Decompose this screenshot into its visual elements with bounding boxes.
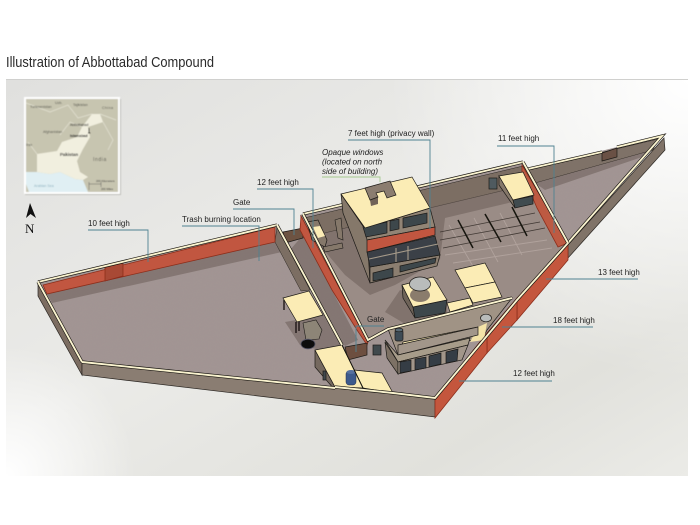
central courtyard floor <box>303 166 568 342</box>
label: 12 feet high outer: 12 feet high <box>513 369 555 378</box>
main house <box>341 177 440 283</box>
map: Arabian Sea <box>26 172 88 192</box>
carport <box>283 291 323 349</box>
label: 12 feet high inner: 12 feet high <box>257 178 299 187</box>
annex: satellite dish <box>410 277 430 291</box>
front wall tops <box>38 162 568 398</box>
main house: roof <box>341 177 430 228</box>
bottom building: small dish <box>480 314 492 322</box>
main house: lower floor <box>370 255 440 283</box>
label: 7 feet privacy wall <box>348 129 435 229</box>
carport: tyre pit <box>301 339 315 349</box>
gate 2 and door <box>345 343 381 360</box>
small shed by red wall <box>307 220 327 247</box>
label: 12 feet high inner <box>257 178 313 248</box>
floor <box>38 136 662 398</box>
main house: middle floor <box>367 236 440 267</box>
outer wall faces <box>38 138 665 417</box>
courtyard grid <box>440 207 552 268</box>
map: labels: Iran <box>26 143 32 147</box>
bottom building: canopy <box>385 338 470 362</box>
map: labels: 200 Miles <box>101 187 114 191</box>
top right building <box>499 172 534 208</box>
bottom building: roof level <box>388 298 512 355</box>
map: labels: Pakistan <box>60 152 78 157</box>
red wall: 12 feet outer <box>435 333 487 418</box>
label: 13 feet high <box>546 268 640 279</box>
map: labels: Turkmenistan <box>30 105 52 109</box>
red wall: 10 feet <box>43 227 275 294</box>
north arrow: N <box>25 221 35 236</box>
label: 12 feet high outer <box>459 369 555 381</box>
bottom building: side <box>385 342 398 374</box>
label: 10 feet high <box>88 219 148 262</box>
blue barrel <box>346 370 356 385</box>
cream sheds <box>447 263 502 312</box>
label: 18 feet high <box>502 316 595 327</box>
right gate <box>602 148 617 161</box>
map: labels <box>26 101 115 191</box>
locator map <box>24 97 121 195</box>
label: opaque windows <box>322 148 383 182</box>
title: Illustration of Abbottabad Compound <box>6 55 214 71</box>
back wall gates and door <box>283 148 617 243</box>
map: borders <box>26 103 116 154</box>
label: gate: Gate <box>233 198 251 207</box>
left divider wall inner face <box>275 227 310 291</box>
red wall: 10 feet gate <box>105 263 123 281</box>
map: labels: 200 Kilometers <box>96 179 115 183</box>
annex: dish shadow <box>410 288 430 302</box>
annex with dish <box>402 277 447 318</box>
map: scale bar <box>89 182 101 190</box>
main house: side <box>341 194 370 283</box>
back door <box>489 178 497 189</box>
back wall inner faces <box>304 139 658 236</box>
map: labels: Uzb. <box>55 101 62 105</box>
map: labels: Islamabad <box>70 134 88 138</box>
map: labels: Arabian Sea <box>34 184 54 188</box>
red wall: 13 feet <box>517 243 568 320</box>
bottom building: cream roof strip <box>402 327 478 345</box>
back wall tops <box>38 136 662 282</box>
bottom building: water tank <box>395 328 403 341</box>
map: labels: Tajikistan <box>73 103 88 107</box>
label: 11 feet high: 11 feet high <box>498 134 539 143</box>
label: gate 2 <box>356 315 385 352</box>
main house: red band <box>367 227 435 252</box>
bottom building: upper front <box>398 327 478 355</box>
main house: rooftop structure <box>365 181 396 200</box>
label: 18 feet high: 18 feet high <box>553 316 595 325</box>
north gate <box>283 228 303 243</box>
label: 13 feet high: 13 feet high <box>598 268 640 277</box>
label: opaque windows: (located on north <box>322 158 383 166</box>
courtyard stub walls <box>323 218 343 252</box>
bottom building: lower front <box>398 345 468 374</box>
bottom building <box>385 298 512 374</box>
north arrow <box>25 203 36 236</box>
label: 7 feet privacy wall: 7 feet high (privacy wall) <box>348 129 435 138</box>
label: trash burning location <box>182 215 261 261</box>
map: labels: Afghanistan <box>43 130 62 134</box>
carport: roof <box>283 291 323 322</box>
label: opaque windows: side of building) <box>322 167 378 176</box>
carport: bin <box>303 320 322 340</box>
lower left outbuildings <box>315 345 393 393</box>
red wall: 18 feet <box>487 298 517 353</box>
red wall: 12 feet inner <box>300 216 368 345</box>
carport: legs <box>284 300 299 333</box>
map: labels: China <box>102 106 113 110</box>
map: labels: India <box>93 157 107 163</box>
compound illustration <box>38 136 665 418</box>
main house: rooftop structure shadow <box>370 197 378 206</box>
map: Pakistan <box>37 114 103 180</box>
floor shadows <box>47 150 653 350</box>
label: opaque windows: Opaque windows <box>322 148 383 157</box>
red wall: 11 feet inner <box>522 165 568 247</box>
label: 11 feet high <box>497 134 554 233</box>
label: 10 feet high: 10 feet high <box>88 219 130 228</box>
background panel <box>6 79 688 476</box>
label: trash burning location: Trash burning location <box>182 215 261 224</box>
map: labels: Abbottabad <box>70 123 88 127</box>
main house: upper front <box>365 208 435 240</box>
map: city marker <box>88 128 90 133</box>
red walls <box>43 165 568 418</box>
label: gate 2: Gate <box>367 315 385 324</box>
label: gate <box>233 198 294 235</box>
